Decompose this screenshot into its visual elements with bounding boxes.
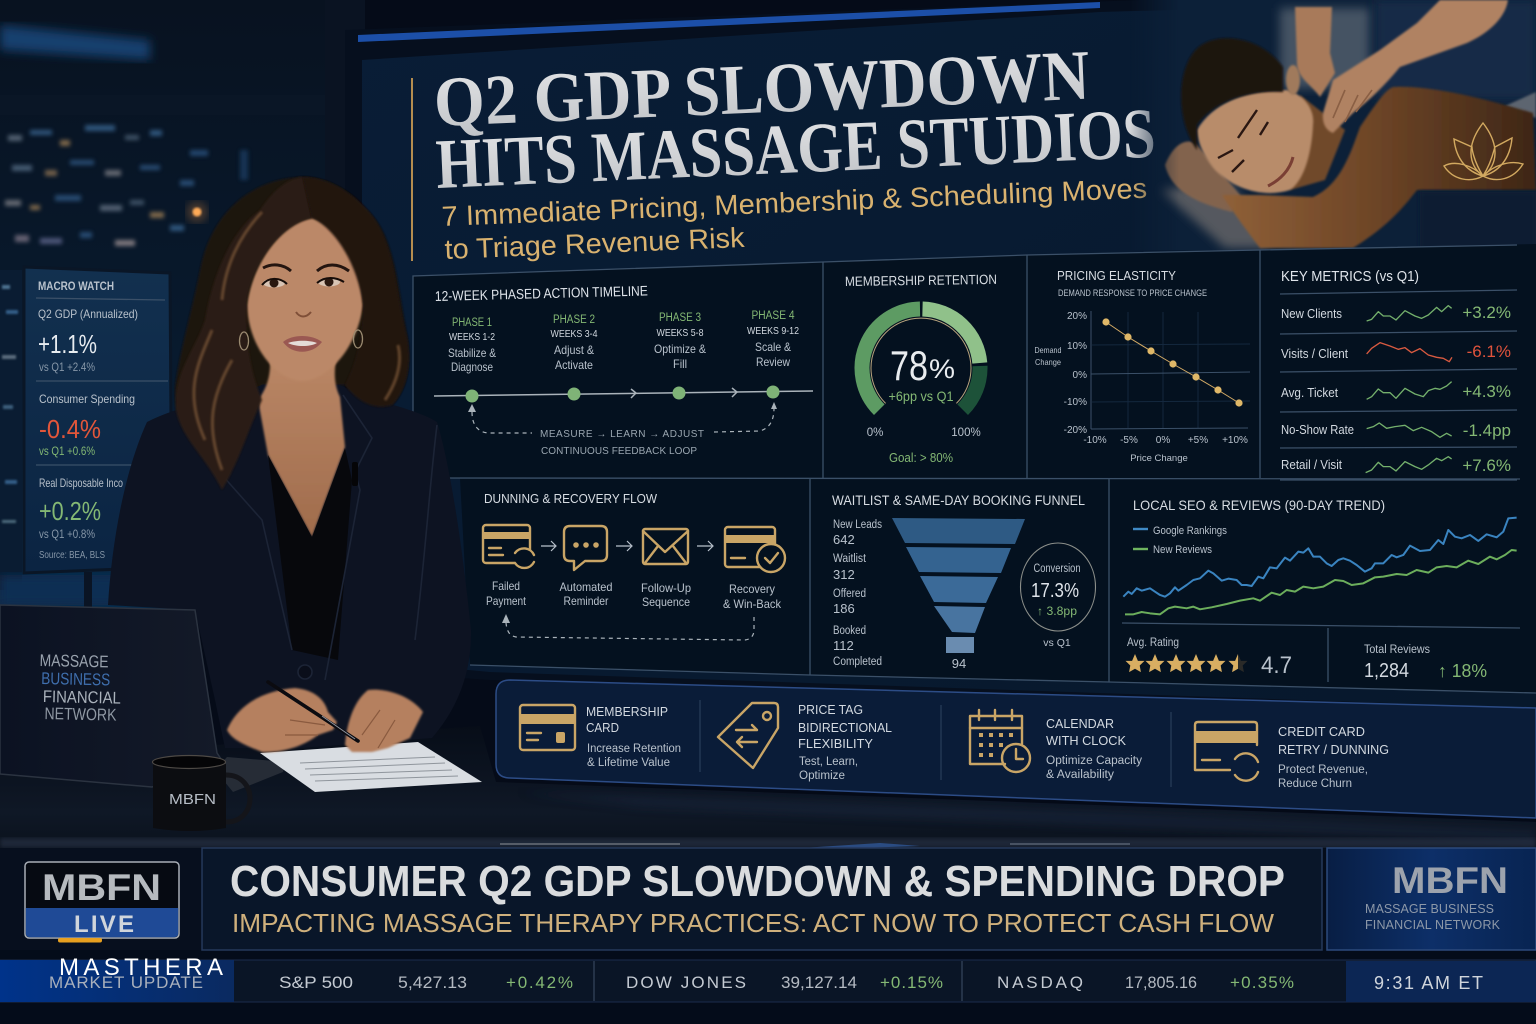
icon: recovery card with check bbox=[725, 527, 785, 572]
face bbox=[1197, 90, 1313, 193]
macro: GDP: +1.1% bbox=[38, 329, 97, 359]
item: calendar with clock bbox=[970, 710, 1142, 781]
metric values bbox=[1462, 303, 1511, 475]
quote: S&P 500: 5,427.13 bbox=[398, 973, 467, 992]
funnel labels: Completed bbox=[833, 656, 882, 668]
funnel labels: 642 bbox=[833, 532, 855, 547]
phase 1: Stabilize & bbox=[448, 346, 496, 360]
scatter chart: +10% bbox=[1222, 435, 1248, 446]
phase 1: Diagnose bbox=[451, 360, 493, 374]
flow labels: Automated bbox=[560, 580, 612, 594]
flow labels: Payment bbox=[486, 594, 527, 608]
face bbox=[247, 218, 363, 381]
eyes bbox=[262, 278, 344, 288]
metric labels: Retail / Visit bbox=[1281, 458, 1342, 472]
arrow bbox=[697, 541, 713, 551]
neck and chest bbox=[258, 360, 345, 537]
phase 2: WEEKS 3-4 bbox=[550, 328, 598, 340]
phase 3: PHASE 3 bbox=[659, 312, 701, 324]
hair back bbox=[175, 177, 409, 478]
mug bbox=[152, 756, 250, 831]
funnel chart bbox=[892, 518, 1025, 671]
funnel labels: 186 bbox=[833, 601, 855, 616]
conversion badge: 17.3% bbox=[1031, 580, 1079, 602]
phase 2: PHASE 2 bbox=[553, 314, 595, 326]
macro: GDP: vs Q1 +2.4% bbox=[39, 362, 95, 374]
scatter chart: -10% bbox=[1083, 435, 1107, 446]
gauge value: +6pp vs Q1 bbox=[888, 388, 954, 404]
jacket bbox=[108, 385, 471, 748]
therapist arm: vertical bbox=[1295, 7, 1335, 97]
scatter chart: 0% bbox=[1073, 370, 1087, 381]
network badge: FINANCIAL NETWORK bbox=[1365, 918, 1501, 932]
hair right lock bbox=[303, 177, 409, 407]
funnel labels: Offered bbox=[833, 588, 866, 600]
loop labels bbox=[540, 429, 704, 457]
item: membership card: MEMBERSHIP bbox=[586, 705, 668, 719]
eyes and lips bbox=[1218, 110, 1268, 172]
headline banner: CONSUMER Q2 GDP SLOWDOWN & SPENDING DROP bbox=[230, 857, 1285, 906]
therapist arm: diagonal with hand bbox=[1323, 0, 1508, 133]
quote: Dow Jones: DOW JONES bbox=[626, 973, 746, 992]
item: price tag: PRICE TAG bbox=[798, 703, 863, 717]
network badge bbox=[1327, 848, 1536, 950]
legend: Google Rankings bbox=[1153, 525, 1227, 537]
ticker label: MARKET UPDATE bbox=[49, 973, 203, 992]
funnel labels: Waitlist bbox=[833, 553, 867, 565]
gauge scale bbox=[867, 427, 981, 465]
metric values: +4.3% bbox=[1462, 382, 1511, 401]
macro: consumer spending bbox=[39, 392, 135, 458]
phase 2: Activate bbox=[555, 358, 593, 372]
subtitle: to Triage Revenue Risk bbox=[444, 222, 746, 265]
hair bbox=[1181, 38, 1283, 150]
market ticker bbox=[0, 954, 1536, 1002]
panel: local SEO and reviews: LOCAL SEO & REVIEWS (90-DAY TREND) bbox=[1133, 497, 1385, 513]
item: calendar with clock: WITH CLOCK bbox=[1046, 734, 1127, 748]
phase 3: WEEKS 5-8 bbox=[656, 327, 704, 339]
panel: key metrics bbox=[1280, 269, 1517, 480]
scatter chart: 20% bbox=[1067, 311, 1087, 322]
panel: pricing elasticity bbox=[1034, 268, 1250, 464]
panel: 12-week timeline bbox=[434, 282, 813, 457]
neck bbox=[1290, 95, 1345, 190]
quote: Nasdaq bbox=[997, 973, 1294, 992]
flow labels: Recovery bbox=[729, 582, 775, 596]
flow labels: & Win-Back bbox=[723, 597, 782, 611]
macro: disposable income: Real Disposable Inco bbox=[39, 476, 123, 490]
lapels bbox=[222, 395, 437, 680]
total reviews: ↑ 18% bbox=[1438, 661, 1487, 681]
phase 4: Review bbox=[756, 355, 790, 369]
mug: MBFN bbox=[169, 791, 216, 808]
loop labels: MEASURE → LEARN → ADJUST bbox=[540, 429, 704, 440]
phase 4 bbox=[747, 310, 799, 369]
ear bbox=[1286, 65, 1300, 95]
timeline track bbox=[434, 386, 813, 402]
macro: GDP: Q2 GDP (Annualized) bbox=[38, 307, 138, 321]
metric values: +7.6% bbox=[1462, 456, 1511, 475]
retry loop arrow bbox=[502, 614, 754, 640]
panel: macro watch bbox=[24, 267, 172, 608]
macro: disposable income: vs Q1 +0.8% bbox=[39, 529, 95, 541]
headline banner: IMPACTING MASSAGE THERAPY PRACTICES: ACT NOW TO PROTECT CASH FLOW bbox=[232, 908, 1274, 938]
macro: disposable income bbox=[39, 476, 123, 561]
phase 1: WEEKS 1-2 bbox=[449, 331, 495, 343]
flow labels: Follow-Up bbox=[641, 581, 691, 595]
desk bbox=[0, 726, 1536, 850]
title: HITS MASSAGE STUDIOS bbox=[434, 95, 1157, 204]
mouth bbox=[283, 336, 322, 352]
icon: message bubble bbox=[564, 526, 607, 570]
ticker label: MASTHERA bbox=[59, 954, 223, 981]
sparklines bbox=[1366, 306, 1452, 473]
scatter chart: -20% bbox=[1064, 425, 1087, 436]
flow labels: Sequence bbox=[642, 595, 690, 609]
earrings bbox=[240, 332, 248, 350]
panel: dunning and recovery flow bbox=[483, 491, 785, 640]
panel: membership retention bbox=[845, 272, 997, 465]
quote: S&P 500: +0.42% bbox=[506, 973, 573, 992]
title bbox=[432, 37, 1157, 204]
funnel chart: 94 bbox=[952, 656, 966, 671]
scatter chart: 10% bbox=[1067, 341, 1087, 352]
item: membership card: Increase Retention bbox=[587, 743, 681, 755]
item: credit card retry: RETRY / DUNNING bbox=[1278, 743, 1389, 757]
towel bbox=[1160, 180, 1270, 248]
quote: Dow Jones: 39,127.14 bbox=[781, 973, 857, 992]
macro heading: MACRO WATCH bbox=[38, 279, 114, 293]
paper document bbox=[260, 742, 482, 792]
metric values: +3.2% bbox=[1462, 303, 1511, 322]
background: city window bbox=[0, 0, 365, 640]
icon: gold lotus bbox=[1444, 123, 1523, 180]
panel: membership retention: MEMBERSHIP RETENTION bbox=[845, 272, 997, 289]
macro: GDP bbox=[38, 307, 138, 374]
laptop branding: NETWORK bbox=[44, 704, 117, 725]
panel: pricing elasticity: DEMAND RESPONSE TO PRICE CHANGE bbox=[1058, 288, 1207, 299]
hair highlights bbox=[194, 212, 400, 470]
metric labels bbox=[1281, 307, 1354, 472]
item: calendar with clock: & Availability bbox=[1046, 769, 1114, 781]
anchor bbox=[108, 177, 471, 748]
item: price tag: Test, Learn, bbox=[799, 756, 858, 768]
trend chart bbox=[1123, 518, 1517, 614]
arrow bbox=[616, 541, 632, 551]
scatter chart: Demand bbox=[1034, 345, 1062, 355]
item: membership card: & Lifetime Value bbox=[587, 757, 670, 769]
gauge scale: Goal: > 80% bbox=[889, 451, 953, 465]
gauge bbox=[862, 309, 980, 410]
scatter chart: -5% bbox=[1120, 435, 1138, 446]
scatter chart: Change bbox=[1035, 357, 1061, 367]
timeline heading: 12-WEEK PHASED ACTION TIMELINE bbox=[435, 282, 648, 304]
hair left lock bbox=[176, 177, 312, 490]
laptop branding: MASSAGE bbox=[39, 651, 109, 671]
subtitle: 7 Immediate Pricing, Membership & Scheduling Moves bbox=[441, 173, 1148, 232]
average rating: 4.7 bbox=[1261, 652, 1292, 679]
item: price tag: Optimize bbox=[799, 770, 845, 782]
back and arm bbox=[1222, 87, 1536, 248]
legend: New Reviews bbox=[1153, 544, 1212, 556]
conversion badge: vs Q1 bbox=[1043, 637, 1071, 649]
item: price tag: BIDIRECTIONAL bbox=[798, 721, 892, 735]
gauge value: 78 bbox=[890, 342, 928, 389]
laptop bbox=[0, 605, 225, 787]
quote: Nasdaq: +0.35% bbox=[1230, 973, 1294, 992]
conversion badge bbox=[1020, 543, 1096, 649]
arrow bbox=[541, 541, 556, 551]
phase 2: Adjust & bbox=[554, 343, 594, 357]
quote: Nasdaq: NASDAQ bbox=[997, 973, 1083, 992]
macro: consumer spending: Consumer Spending bbox=[39, 392, 135, 406]
feedback loop arrow bbox=[472, 408, 774, 433]
metric values: -6.1% bbox=[1467, 342, 1511, 361]
metric labels: Avg. Ticket bbox=[1281, 386, 1338, 400]
item: credit card retry: CREDIT CARD bbox=[1278, 725, 1365, 739]
icon: envelope bbox=[643, 529, 688, 564]
total reviews: 1,284 bbox=[1364, 660, 1409, 682]
quote: S&P 500: S&P 500 bbox=[279, 973, 353, 992]
ticker label bbox=[49, 954, 223, 992]
scatter chart: 0% bbox=[1156, 435, 1170, 446]
gauge scale: 100% bbox=[951, 427, 981, 439]
panel: dunning and recovery flow: DUNNING & RECOVERY FLOW bbox=[484, 491, 658, 506]
phase 1: PHASE 1 bbox=[452, 317, 492, 329]
metric values: -1.4pp bbox=[1463, 421, 1511, 440]
funnel labels: New Leads bbox=[833, 519, 882, 531]
phase 4: PHASE 4 bbox=[752, 310, 795, 322]
panel: waitlist funnel: WAITLIST & SAME-DAY BOOKING FUNNEL bbox=[832, 493, 1085, 508]
funnel labels: 312 bbox=[833, 567, 855, 582]
logo box: MBFN live: LIVE bbox=[74, 911, 134, 938]
phase 2 bbox=[550, 314, 598, 372]
photo: massage client bbox=[1130, 0, 1536, 250]
lavalier mic bbox=[352, 462, 358, 486]
icon: failed payment card bbox=[483, 525, 534, 568]
macro: disposable income: Source: BEA, BLS bbox=[39, 549, 105, 561]
panel: action icon strip bbox=[496, 680, 1536, 818]
gauge value: % bbox=[929, 354, 955, 384]
logo box: MBFN live: MBFN bbox=[42, 867, 161, 908]
macro: disposable income: +0.2% bbox=[39, 496, 101, 526]
panel: key metrics: KEY METRICS (vs Q1) bbox=[1281, 269, 1419, 285]
conversion badge: ↑ 3.8pp bbox=[1037, 604, 1077, 618]
scatter chart: +5% bbox=[1188, 435, 1208, 446]
phase 1 bbox=[448, 317, 496, 374]
total reviews: Total Reviews bbox=[1364, 644, 1430, 656]
nose bbox=[296, 312, 311, 316]
scatter chart: -10% bbox=[1064, 397, 1087, 408]
hands and pen bbox=[227, 682, 423, 752]
phase 3: Optimize & bbox=[654, 342, 706, 356]
loop labels: CONTINUOUS FEEDBACK LOOP bbox=[541, 446, 697, 457]
item: membership card bbox=[520, 705, 681, 769]
laptop branding: FINANCIAL bbox=[43, 687, 121, 708]
laptop branding: BUSINESS bbox=[41, 669, 110, 689]
gauge scale: 0% bbox=[867, 427, 883, 439]
item: credit card retry bbox=[1195, 722, 1389, 790]
network badge: MBFN bbox=[1392, 860, 1508, 901]
item: calendar with clock: CALENDAR bbox=[1046, 717, 1114, 731]
headline banner bbox=[202, 848, 1322, 950]
title: Q2 GDP SLOWDOWN bbox=[432, 37, 1091, 142]
item: price tag bbox=[718, 703, 892, 782]
fabric bbox=[1422, 190, 1472, 191]
item: membership card: CARD bbox=[586, 721, 619, 735]
panel: pricing elasticity: PRICING ELASTICITY bbox=[1057, 268, 1176, 283]
laptop branding bbox=[38, 651, 122, 725]
folder under mug bbox=[215, 757, 286, 792]
item: credit card retry: Reduce Churn bbox=[1278, 778, 1352, 790]
scatter chart: Price Change bbox=[1130, 453, 1188, 464]
flow labels: Reminder bbox=[564, 594, 608, 608]
quote: Nasdaq: 17,805.16 bbox=[1125, 973, 1197, 992]
item: calendar with clock: Optimize Capacity bbox=[1046, 755, 1142, 767]
flow labels: Failed bbox=[492, 579, 520, 593]
item: credit card retry: Protect Revenue, bbox=[1278, 764, 1368, 776]
quote: Dow Jones bbox=[626, 973, 943, 992]
funnel labels: 112 bbox=[833, 638, 854, 653]
item: price tag: FLEXIBILITY bbox=[798, 737, 874, 751]
metric labels: New Clients bbox=[1281, 307, 1342, 321]
quote: Dow Jones: +0.15% bbox=[880, 973, 943, 992]
conversion badge: Conversion bbox=[1034, 563, 1080, 575]
average rating bbox=[1126, 637, 1292, 679]
pale forearm under head bbox=[1165, 142, 1240, 212]
metric labels: Visits / Client bbox=[1281, 347, 1348, 361]
network badge: MASSAGE BUSINESS bbox=[1365, 902, 1494, 916]
quote: S&P 500 bbox=[279, 973, 573, 992]
shirt bbox=[268, 448, 352, 660]
macro: consumer spending: vs Q1 +0.6% bbox=[39, 446, 95, 458]
phase 4: Scale & bbox=[755, 340, 791, 354]
phase 3 bbox=[654, 312, 706, 371]
headline bar accent bbox=[411, 78, 413, 261]
subtitle bbox=[441, 173, 1148, 265]
phase 3: Fill bbox=[673, 357, 687, 371]
legend bbox=[1133, 525, 1227, 556]
funnel labels: Booked bbox=[833, 625, 866, 637]
average rating: Avg. Rating bbox=[1127, 637, 1179, 649]
metric labels: No-Show Rate bbox=[1281, 423, 1354, 437]
lower third base bbox=[0, 848, 1536, 1024]
gauge value bbox=[888, 342, 955, 404]
main display wall bbox=[345, 0, 1536, 708]
phase 4: WEEKS 9-12 bbox=[747, 325, 799, 337]
panel: local SEO and reviews bbox=[1122, 497, 1520, 682]
scatter chart bbox=[1034, 311, 1250, 464]
eyebrows bbox=[263, 265, 349, 271]
funnel labels bbox=[833, 519, 882, 668]
macro: consumer spending: -0.4% bbox=[39, 414, 101, 444]
panel: waitlist funnel bbox=[832, 493, 1096, 671]
panels backing bbox=[413, 244, 1536, 693]
total reviews bbox=[1364, 644, 1487, 682]
flow labels bbox=[486, 579, 782, 611]
logo box: MBFN live bbox=[0, 848, 201, 950]
clock: 9:31 AM ET bbox=[1374, 973, 1483, 993]
